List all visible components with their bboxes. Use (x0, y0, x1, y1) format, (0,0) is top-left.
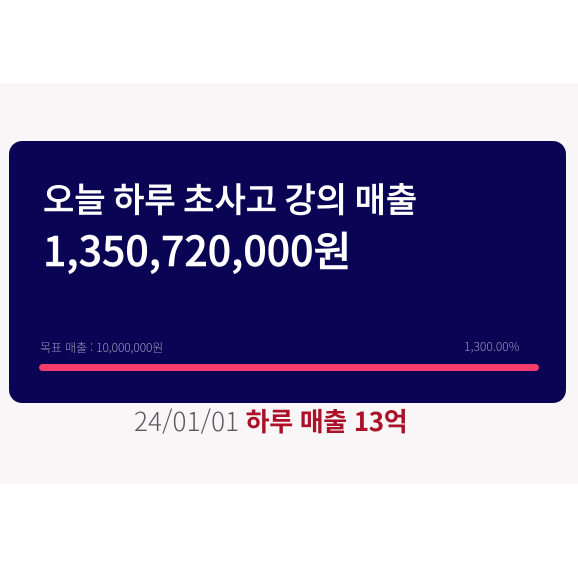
heading: 오늘 하루 초사고 강의 매출 (43, 173, 417, 222)
panel: sales card (9, 141, 566, 403)
percentage label: 1,300.00% (464, 338, 520, 355)
caption: 24/01/01 하루 매출 13억 (134, 402, 407, 439)
target label: 목표 매출 : 10,000,000원 (40, 339, 163, 356)
background band (0, 83, 578, 484)
sales amount: 1,350,720,000원 (43, 218, 351, 278)
progress bar (39, 364, 539, 371)
